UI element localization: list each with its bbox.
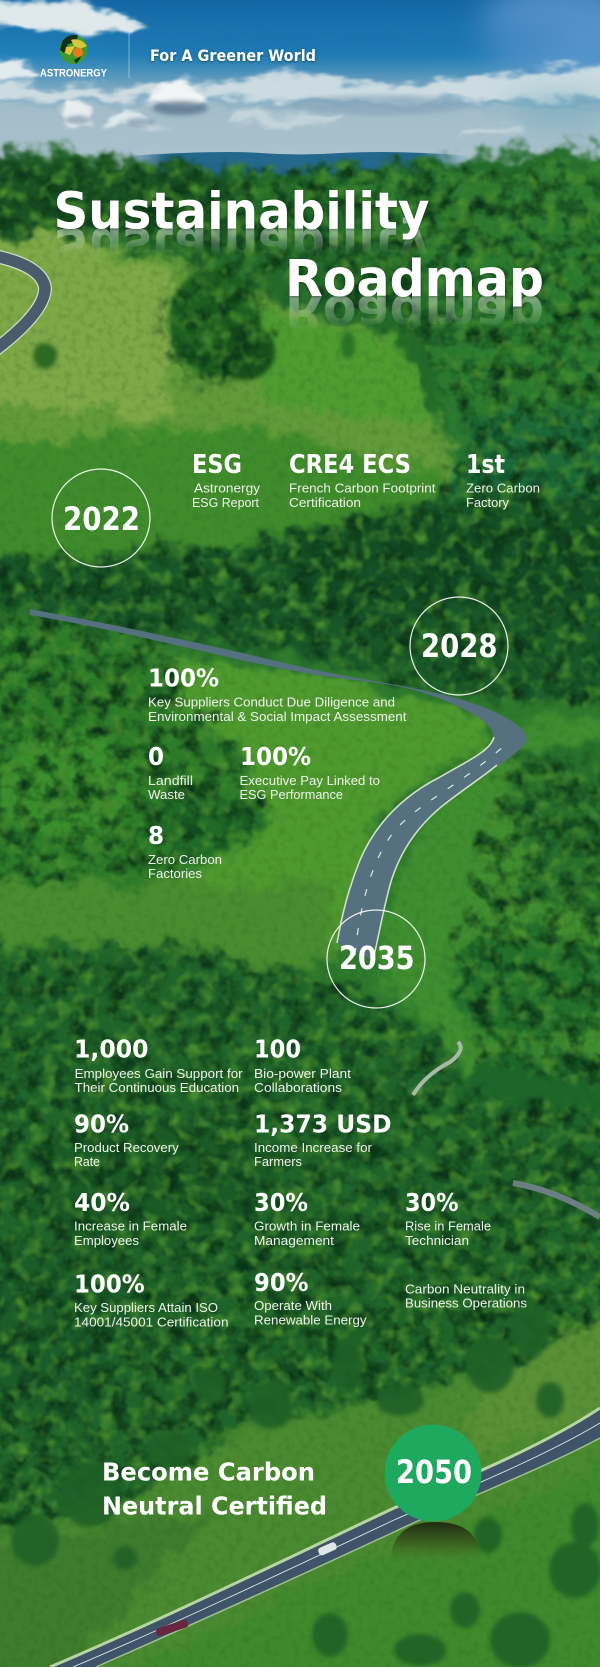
goal: employee education	[74, 1034, 243, 1095]
goal: CRE4 ECS certification: Certification	[289, 495, 361, 510]
goal: CRE4 ECS certification: CRE4 ECS	[289, 450, 411, 480]
goal: first zero carbon factory: Factory	[466, 495, 509, 510]
road: winding middle road	[30, 609, 527, 960]
title reflections	[54, 216, 544, 342]
goal: product recovery	[74, 1110, 179, 1169]
grass hill	[0, 224, 510, 590]
goal: supplier due diligence: Environmental & Social Impact Assessment	[148, 709, 407, 724]
milestone 2028 circle: 2028	[421, 627, 498, 665]
goal: female technicians	[405, 1188, 491, 1248]
goal: employee education: Their Continuous Education	[75, 1080, 239, 1095]
goal: carbon neutrality in operations: Business Operations	[405, 1296, 528, 1311]
goal: supplier ISO certification	[74, 1270, 228, 1330]
goal: farmer income: 1,373 USD	[254, 1110, 392, 1139]
road: small distant roads	[413, 1042, 600, 1217]
goal: female employees: Increase in Female	[74, 1219, 187, 1234]
milestone 2035 circle	[327, 910, 425, 1008]
goal: female management: 30%	[254, 1188, 308, 1217]
goal: executive pay: ESG Performance	[240, 787, 343, 802]
goal: employee education: 1,000	[74, 1034, 148, 1063]
goal: ESG report: ESG Report	[192, 495, 259, 510]
goal: female management	[254, 1188, 360, 1248]
goal: zero landfill waste: 0	[148, 742, 164, 771]
lower dark forest	[0, 945, 600, 1540]
goal: female employees: 40%	[74, 1188, 130, 1217]
left forest	[0, 600, 265, 890]
right forest	[425, 225, 600, 500]
milestone 2028 circle	[410, 597, 508, 695]
goal: female employees: Employees	[74, 1233, 140, 1248]
milestone 2050 badge: 2050	[396, 1453, 472, 1491]
lower scattered trees	[11, 1302, 600, 1667]
title reflections: Roadmap	[285, 283, 544, 342]
milestone 2022 circle	[52, 469, 150, 567]
sky	[0, 0, 600, 170]
goal: 8 zero carbon factories: Zero Carbon	[148, 852, 222, 867]
goal: zero landfill waste: Landfill	[148, 773, 193, 788]
2022 goals	[192, 450, 540, 510]
lower grass	[0, 1270, 600, 1667]
goal: farmer income: Farmers	[254, 1154, 302, 1169]
brand name: ASTRONERGY	[40, 68, 108, 80]
2050 goal statement	[102, 1458, 327, 1521]
goal: supplier ISO certification: 14001/45001 Certification	[74, 1315, 228, 1330]
goal: first zero carbon factory: Zero Carbon	[466, 480, 540, 496]
goal: bio-power plants	[254, 1034, 351, 1095]
title text: Sustainability	[54, 182, 430, 242]
goal: female technicians: Rise in Female	[405, 1219, 491, 1234]
2035 goals	[74, 1034, 528, 1330]
goal: product recovery: Rate	[74, 1154, 100, 1169]
goal: renewable energy: Renewable Energy	[254, 1313, 367, 1328]
goal: zero landfill waste: Waste	[148, 787, 185, 802]
goal: employee education: Employees Gain Support for	[75, 1066, 243, 1081]
goal: product recovery: Product Recovery	[74, 1140, 179, 1155]
milestone 2035 circle: 2035	[339, 939, 414, 977]
goal: 8 zero carbon factories: 8	[148, 821, 164, 850]
goal: supplier due diligence: Key Suppliers Conduct Due Diligence and	[148, 695, 395, 710]
goal: supplier ISO certification: Key Suppliers Attain ISO	[74, 1300, 218, 1315]
goal: renewable energy: Operate With	[254, 1298, 332, 1313]
goal: bio-power plants: Bio-power Plant	[254, 1066, 351, 1081]
milestone 2050 badge	[384, 1424, 482, 1522]
title text: Roadmap	[285, 250, 544, 309]
goal: farmer income: Income Increase for	[254, 1140, 373, 1155]
goal: ESG report: ESG	[192, 450, 242, 480]
goal: renewable energy: 90%	[254, 1268, 308, 1297]
title reflections: Sustainability	[54, 216, 430, 274]
icon: Astronergy globe logo	[60, 35, 88, 64]
dark forest band	[0, 492, 600, 700]
tagline: For A Greener World	[150, 46, 316, 65]
goal: supplier ISO certification: 100%	[74, 1270, 145, 1299]
goal: supplier due diligence	[148, 664, 407, 724]
goal: first zero carbon factory: 1st	[466, 450, 505, 480]
centre grass	[0, 655, 500, 965]
title text	[54, 182, 544, 309]
road: top left curve	[0, 256, 45, 350]
goal: zero landfill waste	[148, 742, 193, 802]
road: bottom highway	[50, 1408, 600, 1667]
goal: CRE4 ECS certification: French Carbon Footprint	[289, 480, 436, 496]
goal: carbon neutrality in operations	[405, 1282, 528, 1311]
goal: ESG report: Astronergy	[194, 480, 261, 496]
goal: bio-power plants: Collaborations	[254, 1080, 343, 1095]
goal: female employees	[74, 1188, 187, 1248]
goal: executive pay: Executive Pay Linked to	[240, 773, 380, 788]
2050 goal statement: Neutral Certified	[102, 1492, 327, 1521]
goal: executive pay	[240, 742, 380, 802]
right grass and trees	[375, 720, 600, 1120]
goal: CRE4 ECS certification	[289, 450, 436, 510]
goal: supplier due diligence: 100%	[148, 664, 219, 693]
goal: 8 zero carbon factories	[148, 821, 222, 881]
goal: product recovery: 90%	[74, 1110, 129, 1139]
goal: female management: Growth in Female	[254, 1219, 360, 1234]
goal: renewable energy	[254, 1268, 367, 1328]
goal: carbon neutrality in operations: Carbon Neutrality in	[405, 1282, 525, 1296]
tree clump on hill	[33, 268, 355, 380]
goal: bio-power plants: 100	[254, 1034, 301, 1063]
goal: female management: Management	[254, 1233, 334, 1248]
goal: ESG report	[192, 450, 261, 510]
title	[54, 182, 544, 342]
logo and tagline header	[40, 33, 316, 80]
tunnel arch below 2050 badge	[390, 1522, 480, 1566]
distant hills	[125, 152, 470, 180]
goal: 8 zero carbon factories: Factories	[148, 866, 202, 881]
milestone 2022 circle: 2022	[63, 500, 140, 538]
goal: farmer income	[254, 1110, 392, 1169]
goal: female technicians: Technician	[405, 1233, 469, 1248]
2050 goal statement: Become Carbon	[102, 1458, 315, 1487]
goal: female technicians: 30%	[405, 1188, 458, 1217]
goal: executive pay: 100%	[240, 742, 311, 771]
goal: first zero carbon factory	[466, 450, 540, 510]
2028 goals	[148, 664, 407, 881]
